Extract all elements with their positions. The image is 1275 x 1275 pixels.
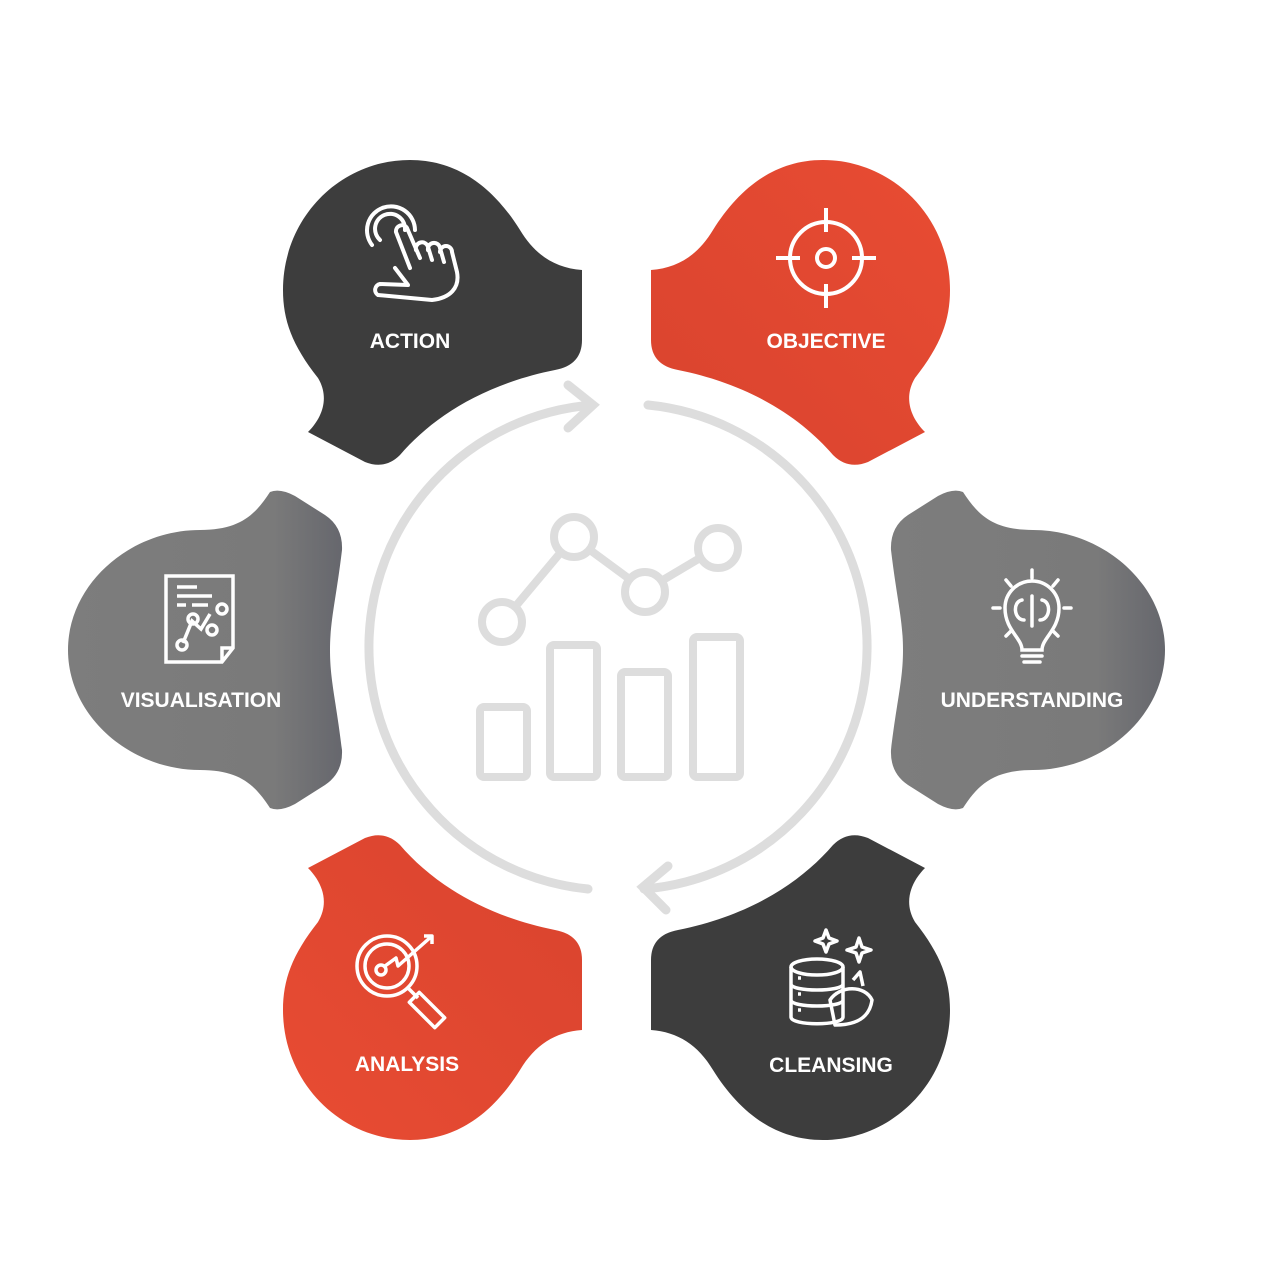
panel: action	[283, 160, 582, 465]
icon: target	[776, 208, 876, 308]
label: ANALYSIS	[355, 1053, 459, 1076]
panel: cleansing	[651, 835, 950, 1140]
icon: database broom	[791, 930, 872, 1025]
label: CLEANSING	[769, 1054, 893, 1077]
label: VISUALISATION	[121, 689, 281, 712]
icon: magnifier analysis	[357, 936, 445, 1028]
icon: hand tap	[367, 206, 458, 300]
center cycle arrows	[369, 385, 867, 910]
icon: chart document	[166, 576, 233, 662]
label: OBJECTIVE	[766, 330, 886, 353]
panel: objective	[651, 160, 950, 465]
icon: lightbulb brain	[993, 570, 1071, 662]
panel: visualisation	[68, 491, 342, 809]
panel: analysis	[283, 835, 582, 1140]
panel: understanding	[891, 491, 1165, 809]
label: UNDERSTANDING	[941, 689, 1123, 712]
label: ACTION	[370, 330, 450, 353]
center chart icon	[480, 517, 740, 777]
